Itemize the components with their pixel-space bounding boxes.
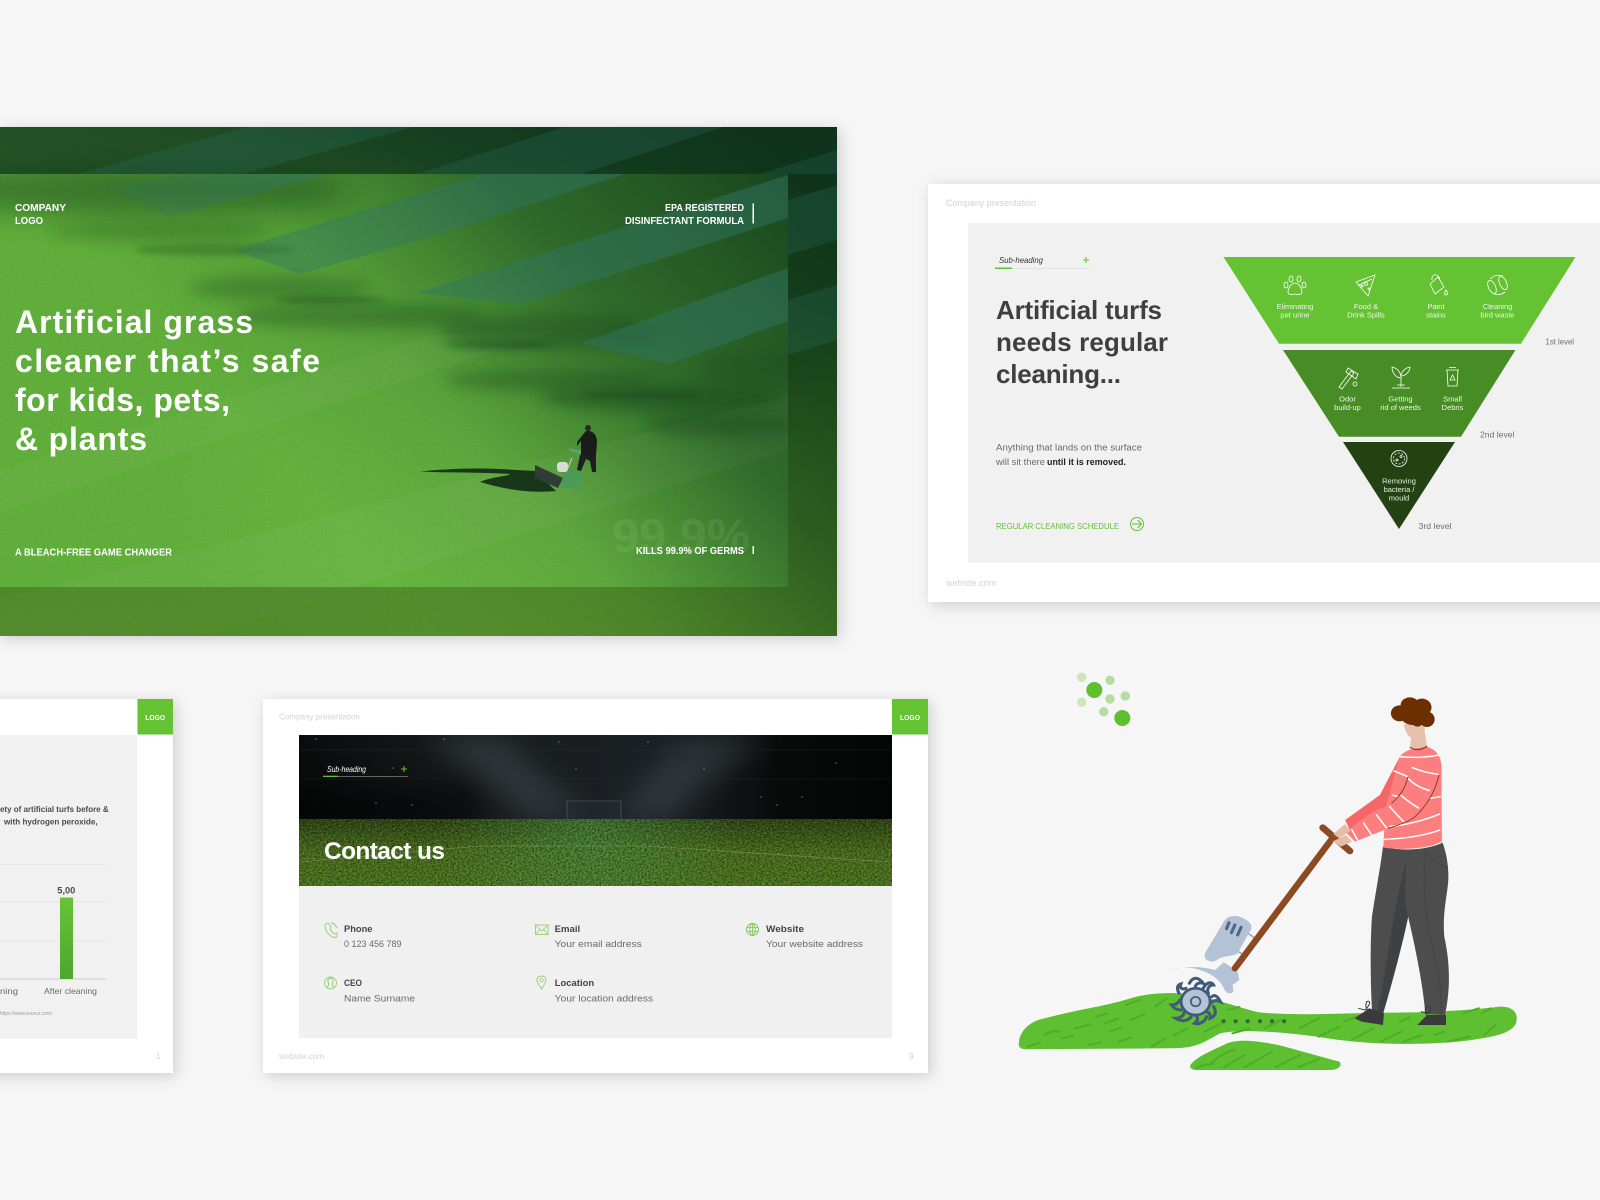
labels: Getting bbox=[1388, 394, 1413, 404]
title: artificial grass cleaner: cleaner that’s safe bbox=[15, 343, 320, 379]
chart description bbox=[0, 804, 109, 826]
bar chart: After cleaning bbox=[44, 986, 97, 996]
icon: plant bbox=[1392, 367, 1410, 388]
labels: Eliminating bbox=[1277, 302, 1313, 311]
header text: Company presentation bbox=[946, 198, 1036, 208]
labels: pet urine bbox=[1280, 310, 1310, 320]
labels: bacteria / bbox=[1384, 485, 1415, 494]
funnel: 1st level bbox=[1224, 257, 1576, 344]
sub-heading: Sub-heading bbox=[327, 765, 366, 774]
faint mowing stripes bbox=[0, 330, 788, 636]
neck and face bbox=[1404, 723, 1427, 751]
logo tab bbox=[138, 699, 173, 734]
labels bbox=[1277, 302, 1515, 320]
labels: Drink Spills bbox=[1347, 310, 1385, 320]
panel: before and after bar chart slide bbox=[0, 699, 173, 1073]
icon: feathers bbox=[1486, 275, 1509, 295]
contact: phone: 0 123 456 789 bbox=[344, 939, 402, 950]
labels: Paint bbox=[1427, 302, 1445, 311]
teal diagonal stripes bbox=[113, 174, 788, 364]
icon: pizza slice bbox=[1356, 275, 1375, 296]
logo tab: LOGO bbox=[145, 713, 165, 722]
infographic canvas bbox=[0, 124, 1600, 1082]
call to action with arrow bbox=[996, 518, 1144, 531]
trousers bbox=[1371, 843, 1449, 1015]
photo: stadium at night bbox=[270, 735, 892, 886]
body text bbox=[995, 442, 1142, 468]
machine motor and guard bbox=[1172, 916, 1254, 993]
contact: website: Website bbox=[766, 924, 804, 935]
body text: until it is removed. bbox=[1047, 457, 1126, 468]
person bbox=[1332, 697, 1449, 1025]
level captions: 1st level bbox=[1546, 336, 1574, 346]
shoes bbox=[1355, 1001, 1446, 1025]
hair bbox=[1391, 697, 1435, 727]
contact: CEO: Name Surname bbox=[344, 994, 415, 1004]
labels: Small bbox=[1443, 394, 1462, 404]
label: EPA registered: DISINFECTANT FORMULA bbox=[625, 215, 744, 227]
title: artificial grass cleaner: Artificial grass bbox=[15, 304, 253, 340]
page number: 9 bbox=[909, 1051, 914, 1061]
contact: phone bbox=[325, 923, 402, 950]
heading bbox=[996, 295, 1168, 389]
back arm bbox=[1345, 757, 1400, 830]
label: bleach-free game changer: A BLEACH-FREE GAME CHANGER bbox=[15, 546, 172, 558]
title: artificial grass cleaner: & plants bbox=[15, 421, 147, 457]
call to action with arrow: REGULAR CLEANING SCHEDULE bbox=[996, 521, 1119, 531]
decorative green dots bbox=[1077, 673, 1130, 726]
photo: man mowing the lawn bbox=[420, 425, 597, 492]
body text: will sit there bbox=[995, 457, 1045, 468]
heading: needs regular bbox=[996, 327, 1168, 357]
watermark: 99.9%: 99.9% bbox=[612, 509, 750, 562]
label: company logo: LOGO bbox=[15, 215, 43, 227]
labels: mould bbox=[1389, 494, 1409, 502]
heading: cleaning... bbox=[996, 359, 1121, 389]
grass ground bbox=[1019, 993, 1517, 1070]
level captions: 3rd level bbox=[1418, 521, 1452, 531]
header text: Company presentation bbox=[279, 712, 360, 722]
sweater bbox=[1345, 746, 1442, 849]
label: company logo: COMPANY bbox=[15, 202, 66, 214]
contact: website bbox=[746, 924, 863, 950]
dark frame bands bbox=[0, 127, 837, 636]
logo tab: LOGO bbox=[900, 713, 920, 722]
icon: paw bbox=[1284, 276, 1306, 295]
illustration: person pushing turf machine bbox=[1019, 697, 1517, 1070]
label: EPA registered bbox=[625, 202, 754, 227]
contact: phone: Phone bbox=[344, 924, 372, 935]
labels: Cleaning bbox=[1483, 302, 1512, 311]
label: kills 99.9% of germs: KILLS 99.9% OF GERMS bbox=[636, 545, 744, 557]
title: artificial grass cleaner: for kids, pets, bbox=[15, 382, 230, 418]
chart description: ety of artificial turfs before & bbox=[0, 804, 109, 814]
contact: location: Location bbox=[555, 978, 594, 989]
icon: hammer bbox=[1339, 368, 1358, 389]
level captions bbox=[1418, 336, 1574, 531]
page number: 1 bbox=[156, 1051, 161, 1061]
heading: contact us: Contact us bbox=[324, 838, 445, 865]
title: artificial grass cleaner bbox=[15, 304, 320, 457]
labels: build-up bbox=[1334, 403, 1361, 412]
icon: bacteria dish bbox=[1391, 450, 1407, 466]
sub-heading: Sub-heading bbox=[999, 255, 1043, 265]
labels bbox=[1334, 394, 1464, 412]
wooden handle bbox=[1235, 828, 1350, 968]
track dots bbox=[1221, 1019, 1286, 1023]
labels: stains bbox=[1426, 310, 1446, 320]
contact: email bbox=[536, 924, 642, 950]
funnel: 3rd level bbox=[1343, 442, 1455, 529]
label: company logo bbox=[15, 202, 66, 227]
source text: https://www.source.com/ bbox=[0, 1011, 53, 1017]
labels: rid of weeds bbox=[1380, 403, 1421, 412]
bar chart bbox=[0, 864, 106, 996]
labels: Food & bbox=[1354, 302, 1378, 311]
labels: Odor bbox=[1339, 394, 1356, 404]
machine wheel bbox=[1172, 978, 1220, 1024]
hands bbox=[1332, 824, 1352, 847]
bar chart: 5,00 bbox=[57, 885, 75, 895]
sub-heading bbox=[323, 765, 408, 777]
contact: email: Email bbox=[555, 924, 580, 935]
contact: website: Your website address bbox=[766, 939, 863, 950]
footer text: website.com bbox=[945, 578, 996, 588]
labels bbox=[1382, 476, 1416, 502]
contact: CEO: CEO bbox=[344, 978, 362, 989]
contact: email: Your email address bbox=[555, 939, 642, 950]
chart description: with hydrogen peroxide, bbox=[3, 816, 98, 826]
contact: location bbox=[537, 976, 653, 1004]
body text: Anything that lands on the surface bbox=[996, 442, 1142, 454]
level captions: 2nd level bbox=[1480, 430, 1515, 440]
contact: CEO bbox=[324, 977, 415, 1004]
heading: Artificial turfs bbox=[996, 295, 1162, 325]
contact: location: Your location address bbox=[555, 994, 653, 1004]
panel: hero slide with grass photo bbox=[0, 127, 837, 636]
bar chart: ning bbox=[0, 986, 18, 996]
panel: turf cleaning levels slide bbox=[928, 184, 1600, 602]
icon: paint bucket bbox=[1430, 275, 1448, 295]
panel: contact us slide bbox=[263, 699, 928, 1073]
labels: Debris bbox=[1442, 403, 1464, 412]
labels: bird waste bbox=[1480, 310, 1515, 320]
sub-heading bbox=[995, 255, 1090, 269]
footer text: website.com bbox=[278, 1051, 324, 1061]
funnel: 2nd level bbox=[1283, 350, 1516, 437]
label: EPA registered: EPA REGISTERED bbox=[665, 202, 744, 214]
logo tab bbox=[892, 699, 928, 734]
labels: Removing bbox=[1382, 476, 1416, 486]
icon: recycling bin bbox=[1446, 368, 1459, 386]
